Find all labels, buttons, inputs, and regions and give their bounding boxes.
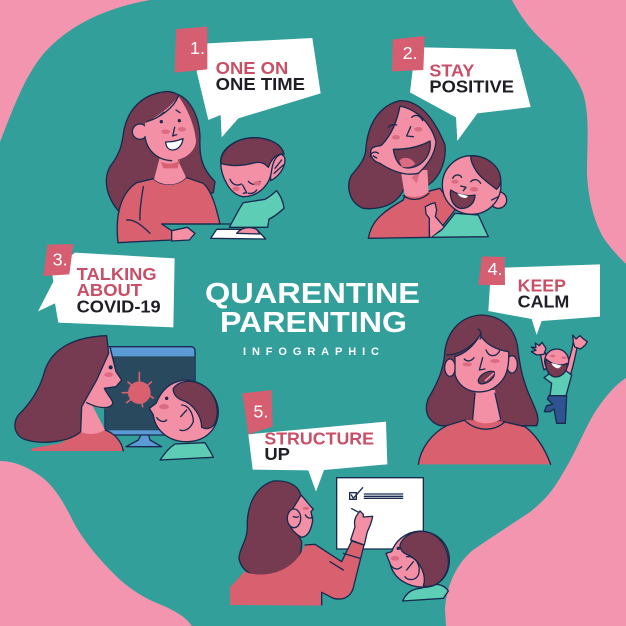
panel 5: structure up <box>230 390 449 606</box>
number tag <box>242 390 273 434</box>
collar <box>403 193 429 199</box>
boy <box>149 380 218 460</box>
face <box>145 96 196 161</box>
nose and brows <box>159 110 180 136</box>
pen stroke <box>352 509 363 514</box>
cheek <box>104 372 113 377</box>
monitor frame <box>105 347 195 435</box>
heading line: POSITIVE <box>429 76 514 96</box>
shirt <box>544 370 572 396</box>
ear <box>132 124 148 139</box>
number tag <box>175 27 207 73</box>
shirt <box>117 177 220 243</box>
head <box>386 531 449 587</box>
eye <box>109 365 113 369</box>
smile <box>391 565 402 569</box>
hair <box>15 336 109 442</box>
heading line: STAY <box>429 61 474 81</box>
tongue <box>399 158 415 167</box>
cheeks <box>550 355 555 357</box>
boy <box>425 156 507 237</box>
heading line: STRUCTURE <box>264 428 374 448</box>
child jumping <box>531 335 587 423</box>
face and neck <box>77 340 122 434</box>
hand <box>172 227 195 241</box>
head <box>221 138 284 197</box>
checklist paper <box>337 478 423 549</box>
mouth <box>546 359 567 377</box>
number tag <box>43 244 73 276</box>
hair <box>400 531 448 586</box>
neck <box>401 170 429 197</box>
title line 2: PARENTING <box>220 307 407 339</box>
hair <box>239 481 302 578</box>
pants <box>544 395 567 423</box>
mother <box>15 336 123 451</box>
cheek <box>303 507 309 510</box>
head <box>442 156 501 214</box>
subtitle: INFOGRAPHIC <box>243 346 379 358</box>
title <box>205 278 420 358</box>
smile <box>157 418 167 421</box>
decorative blob: bottom right <box>445 378 626 626</box>
number tag <box>478 256 505 285</box>
monitor <box>105 347 195 447</box>
cheek <box>159 404 169 409</box>
closed eye and ear details <box>293 515 313 518</box>
paper <box>211 229 266 239</box>
number: 4. <box>488 259 503 279</box>
checkbox <box>350 493 356 499</box>
shirt <box>403 584 448 601</box>
virus spikes <box>122 372 153 407</box>
paper <box>337 478 423 549</box>
closed eyes and nose <box>464 350 500 370</box>
shirt <box>229 191 284 227</box>
list lines <box>364 494 403 498</box>
speech bubble <box>248 422 387 492</box>
laughing mouth <box>450 190 475 208</box>
head <box>149 380 218 442</box>
number: 5. <box>253 401 268 421</box>
cheeks <box>161 129 170 134</box>
virus body <box>128 381 151 404</box>
arms <box>540 350 550 370</box>
speech bubble <box>197 38 321 137</box>
cheeks <box>414 127 422 132</box>
panel 2: stay positive <box>349 36 531 238</box>
hair <box>349 101 445 209</box>
panel 3: talking about covid-19 <box>15 244 218 460</box>
virus icon <box>122 372 153 407</box>
cheek <box>391 556 399 561</box>
mother <box>418 315 551 464</box>
shirt <box>418 420 551 464</box>
mother <box>349 101 455 238</box>
eye <box>397 547 400 550</box>
shirt <box>368 188 455 238</box>
hands <box>531 342 546 355</box>
neck <box>154 157 186 184</box>
panel 1: one on one time <box>106 27 321 243</box>
decorative blob: top right <box>512 0 626 264</box>
neck <box>473 390 501 423</box>
closed eyes and nose <box>388 115 423 137</box>
ear <box>287 509 301 528</box>
mouth <box>478 371 494 384</box>
heading line: KEEP <box>518 276 566 296</box>
arm and hand <box>425 203 444 237</box>
eyes <box>160 120 163 123</box>
boy <box>386 531 449 601</box>
shirt <box>431 213 488 237</box>
check mark <box>351 488 363 498</box>
hair <box>426 315 538 426</box>
heading line: UP <box>264 444 290 464</box>
title line 1: QUARENTINE <box>205 278 420 310</box>
face <box>371 106 436 174</box>
cheeks <box>463 362 472 366</box>
face <box>288 495 313 537</box>
shirt <box>160 443 213 460</box>
number: 3. <box>53 250 68 270</box>
shirt <box>230 541 364 606</box>
heading line: TALKING <box>77 264 157 284</box>
hair <box>221 138 284 167</box>
ear <box>370 152 378 158</box>
ear <box>270 153 285 181</box>
monitor stand <box>126 433 162 447</box>
hair parting <box>447 329 481 355</box>
number tag <box>392 36 425 71</box>
heading line: ONE TIME <box>216 74 305 94</box>
speech bubble <box>410 47 531 141</box>
monitor screen <box>106 356 194 430</box>
number: 2. <box>403 43 418 63</box>
closed eyes and nose <box>230 160 283 194</box>
decorative blob: top left <box>0 0 150 142</box>
mother <box>230 481 373 606</box>
cheeks <box>232 186 240 191</box>
heading line: CALM <box>518 292 569 312</box>
speech bubble <box>38 253 175 327</box>
ear <box>405 557 419 580</box>
smile <box>166 139 183 150</box>
ears <box>445 359 455 376</box>
shirt <box>32 430 123 451</box>
laughing mouth <box>393 141 430 168</box>
teeth <box>457 193 468 198</box>
decorative blob: bottom left <box>0 461 192 626</box>
panel 4: keep calm <box>418 256 600 464</box>
heading line: ONE ON <box>216 58 288 78</box>
speech bubble <box>488 264 600 335</box>
hair <box>173 381 217 429</box>
head <box>545 349 569 373</box>
neck shadow <box>161 160 180 168</box>
cheeks <box>451 180 459 184</box>
ear inner <box>492 197 498 200</box>
closed eyes and nose <box>453 175 481 191</box>
eye <box>165 397 168 400</box>
ear <box>490 192 507 208</box>
heading line: ABOUT <box>77 280 142 300</box>
boy <box>211 138 285 239</box>
hair <box>106 92 215 213</box>
ear <box>180 405 193 431</box>
hair <box>471 156 501 189</box>
face <box>455 335 509 392</box>
hand <box>237 228 260 234</box>
mother <box>106 92 230 243</box>
heading line: COVID-19 <box>77 296 161 316</box>
arm and hand <box>351 511 373 545</box>
number: 1. <box>190 38 205 58</box>
